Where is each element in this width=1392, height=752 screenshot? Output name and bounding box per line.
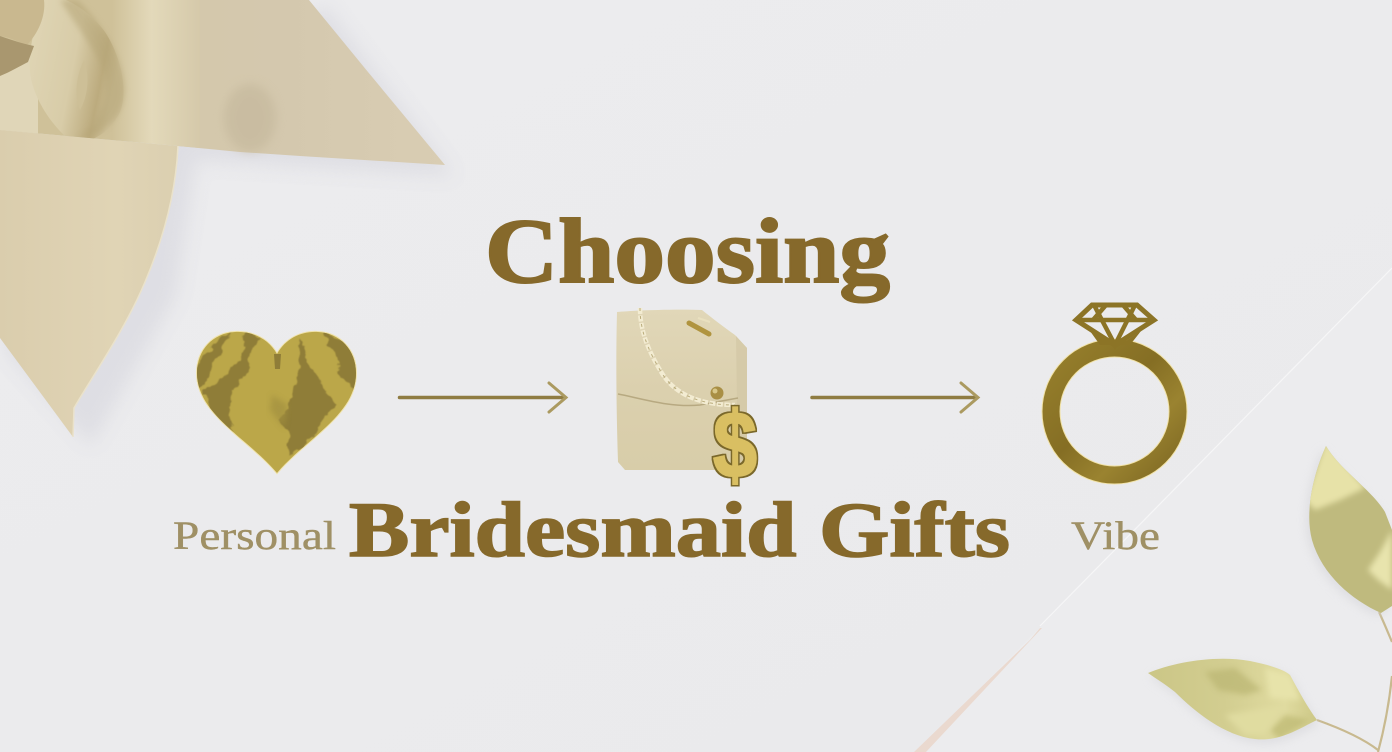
lower leaf — [1148, 658, 1320, 742]
arrow: personal to budget — [400, 383, 566, 412]
icon: diamond ring — [1051, 305, 1178, 475]
earring clasp — [689, 323, 709, 334]
ribbon upper tail — [120, 0, 445, 165]
fold pit — [77, 60, 87, 110]
twill fabric, left — [0, 57, 38, 134]
decorative gold leaves — [1145, 440, 1392, 752]
icon: gold foil heart — [196, 330, 357, 474]
ribbon knot — [0, 0, 200, 150]
label: Vibe: Vibe — [1071, 513, 1160, 558]
label: Personal: Personal — [173, 513, 336, 558]
necklace chain — [640, 308, 735, 405]
shiny band right of knot — [0, 0, 200, 150]
top-left folds — [0, 0, 44, 46]
title: Choosing: Choosing — [485, 200, 890, 302]
dollar charm: $ — [713, 392, 757, 497]
gold bead — [710, 386, 724, 400]
ribbon bow — [0, 0, 454, 446]
upper leaf — [1307, 446, 1392, 618]
arrow: budget to vibe — [812, 383, 978, 412]
icon: jewellery display with dollar charm — [616, 308, 757, 497]
ribbon lower tail — [0, 130, 178, 437]
jewellery stand — [616, 310, 747, 470]
lower right paper sheet — [914, 268, 1392, 752]
title: Bridesmaid Gifts: Bridesmaid Gifts — [349, 486, 1010, 573]
central fold lobe — [31, 0, 117, 138]
leaf stems — [1317, 612, 1392, 752]
